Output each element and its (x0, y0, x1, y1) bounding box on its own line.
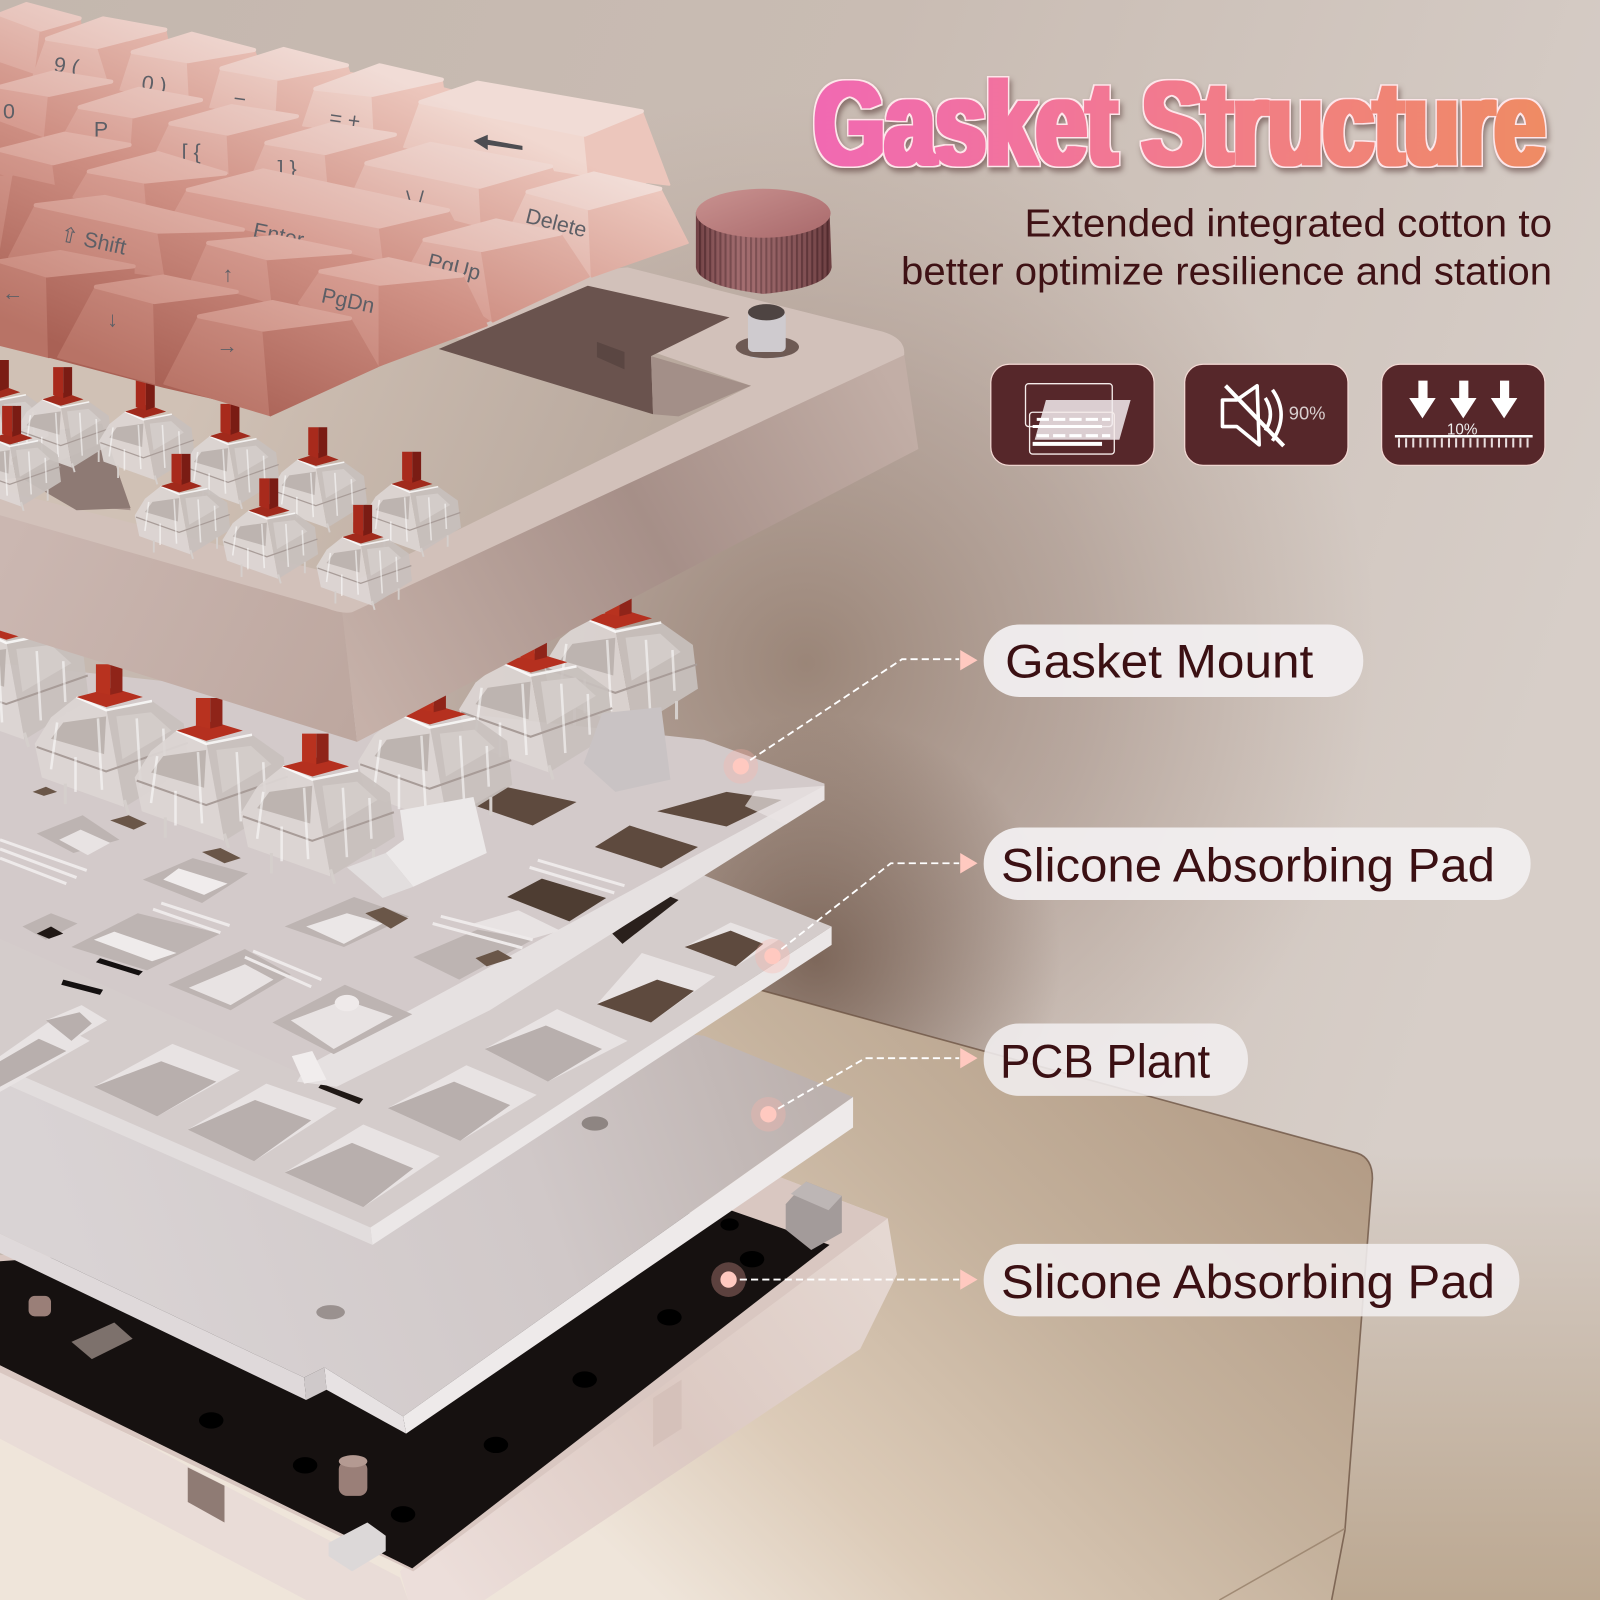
icon: layered cotton (991, 364, 1154, 465)
subtitle: Extended integrated cotton to (1024, 203, 1552, 246)
grey gasket clip (786, 1182, 842, 1250)
key row 2: [ { (182, 140, 201, 164)
black inner plate (0, 1210, 830, 1571)
key row 2: \ / (406, 187, 424, 211)
key row 5: ↓ (107, 308, 118, 332)
key row 4: PgUp (425, 249, 483, 285)
key row 5 (0, 252, 487, 415)
plate switch openings (0, 896, 779, 1207)
frame openings (22, 787, 782, 1054)
lower switches (0, 586, 698, 898)
key row 2 (0, 72, 567, 227)
frame ribs (0, 840, 624, 987)
key row 2: ] } (278, 157, 297, 181)
icon: force arrows 10%: 10% (1447, 422, 1478, 439)
key delete: Delete (523, 204, 589, 242)
key row 4: ⇧ Shift (58, 222, 128, 260)
icon: sound reduction 90%: 90% (1289, 402, 1326, 423)
icon: force arrows 10% (1382, 364, 1545, 465)
key row 1: 0 ) (140, 71, 168, 98)
key row 1: = + (328, 106, 362, 134)
bottom case (0, 1176, 897, 1600)
layer: gasket mount frame (0, 663, 824, 1087)
callout: gasket mount (723, 624, 1363, 784)
callout: slicone absorbing pad upper (755, 828, 1531, 973)
plate cutout (0, 423, 131, 510)
callout: gasket mount: Gasket Mount (1005, 636, 1313, 688)
key row 1: 9 ( (52, 53, 80, 80)
key row 2: P (94, 118, 108, 142)
key row 5: ← (2, 281, 23, 305)
knob (696, 189, 832, 358)
display slot (439, 286, 751, 416)
subtitle (901, 203, 1552, 294)
key row 4 (0, 177, 589, 321)
callout: pcb plant (751, 1023, 1248, 1132)
key row 3: Enter (251, 218, 306, 252)
desk surface (0, 978, 1600, 1600)
subtitle: better optimize resilience and station (901, 251, 1552, 294)
icon: sound reduction 90% (1185, 364, 1348, 465)
keycaps (0, 4, 688, 415)
key row 5: PgDn (319, 283, 377, 318)
layer: slicone absorbing pad plate (0, 796, 832, 1245)
upper switches (0, 360, 461, 610)
top case (0, 267, 918, 742)
key row 5: → (216, 334, 238, 358)
layer: PCB plant foam (0, 969, 853, 1434)
callout: slicone absorbing pad lower: Slicone Absorbing Pad (1001, 1256, 1495, 1308)
key row 3 (0, 134, 460, 260)
stabilizers (347, 707, 670, 898)
callout: slicone absorbing pad lower (711, 1244, 1519, 1316)
key row 1 (0, 4, 446, 134)
key backspace (404, 83, 669, 185)
key row 1: − _ (232, 86, 266, 114)
key row 2: 0 (3, 99, 15, 123)
callout: pcb plant: PCB Plant (1000, 1036, 1210, 1088)
callout: slicone absorbing pad upper: Slicone Absorbing Pad (1001, 840, 1495, 892)
key row 4: ↑ (222, 263, 233, 287)
key delete (511, 173, 688, 277)
